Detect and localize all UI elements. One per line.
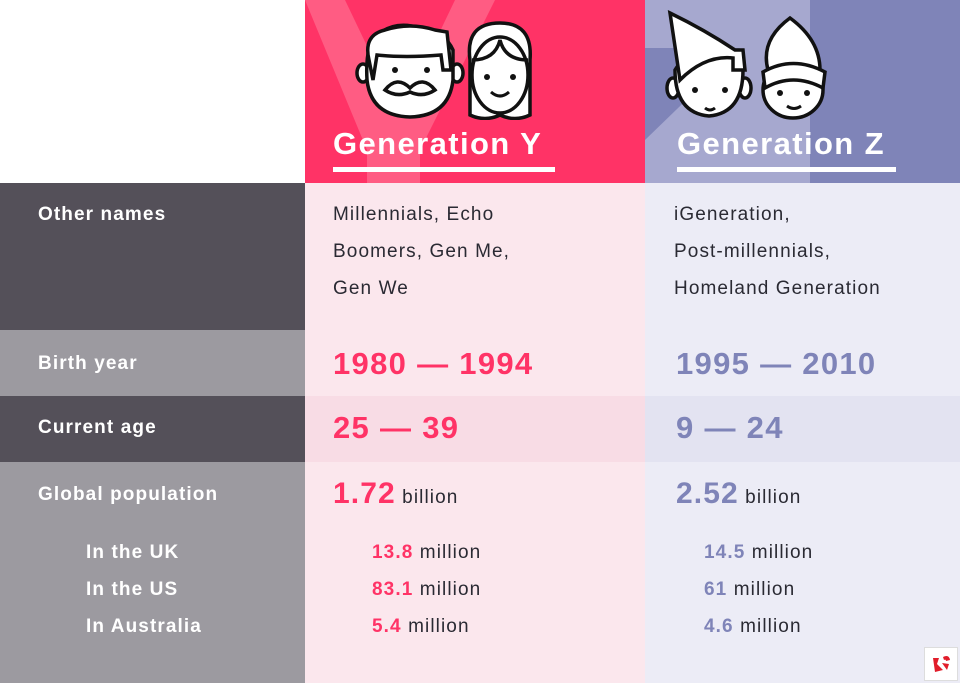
label: Birth year: Birth year: [38, 353, 138, 374]
Z country figures: 4.6 million: [704, 616, 802, 637]
icon: gen Z faces: [665, 10, 827, 120]
row labels column: [0, 183, 305, 683]
Y other names: [333, 204, 510, 299]
Z birth year: 1995 — 2010: [676, 346, 876, 381]
label: UK: In the UK: [86, 542, 179, 563]
Z country figures: [704, 542, 813, 637]
Y other names: Gen We: [333, 278, 409, 299]
Y age: 25 — 39: [333, 410, 459, 445]
Z other names: Post-millennials,: [674, 241, 831, 262]
Z country figures: 14.5 million: [704, 542, 813, 563]
Z other names: [674, 204, 881, 299]
label: Other names: Other names: [38, 204, 166, 225]
column Z background: [645, 183, 960, 683]
header: generation Y: [305, 0, 645, 183]
Z country figures: 61 million: [704, 579, 795, 600]
Y country figures: 13.8 million: [372, 542, 481, 563]
heading: Generation Z: Generation Z: [677, 126, 885, 161]
header: generation Z: [645, 0, 960, 183]
Y country figures: 5.4 million: [372, 616, 470, 637]
Z other names: iGeneration,: [674, 204, 791, 225]
logo: [924, 647, 958, 681]
Y other names: Millennials, Echo: [333, 204, 494, 225]
Z other names: Homeland Generation: [674, 278, 881, 299]
Z age: 9 — 24: [676, 410, 784, 445]
Y birth year: 1980 — 1994: [333, 346, 533, 381]
Y other names: Boomers, Gen Me,: [333, 241, 510, 262]
icon: gen Y faces: [355, 21, 532, 120]
Z population: 2.52 billion: [676, 477, 801, 510]
heading: Generation Y: Generation Y: [333, 126, 542, 161]
Y population: 1.72 billion: [333, 477, 458, 510]
column Y background: [305, 183, 645, 683]
label: Current age: Current age: [38, 417, 157, 438]
label: US: In the US: [86, 579, 178, 600]
Y country figures: 83.1 million: [372, 579, 481, 600]
label: Global population: Global population: [38, 484, 218, 505]
label: Australia: In Australia: [86, 616, 202, 637]
Y country figures: [372, 542, 481, 637]
